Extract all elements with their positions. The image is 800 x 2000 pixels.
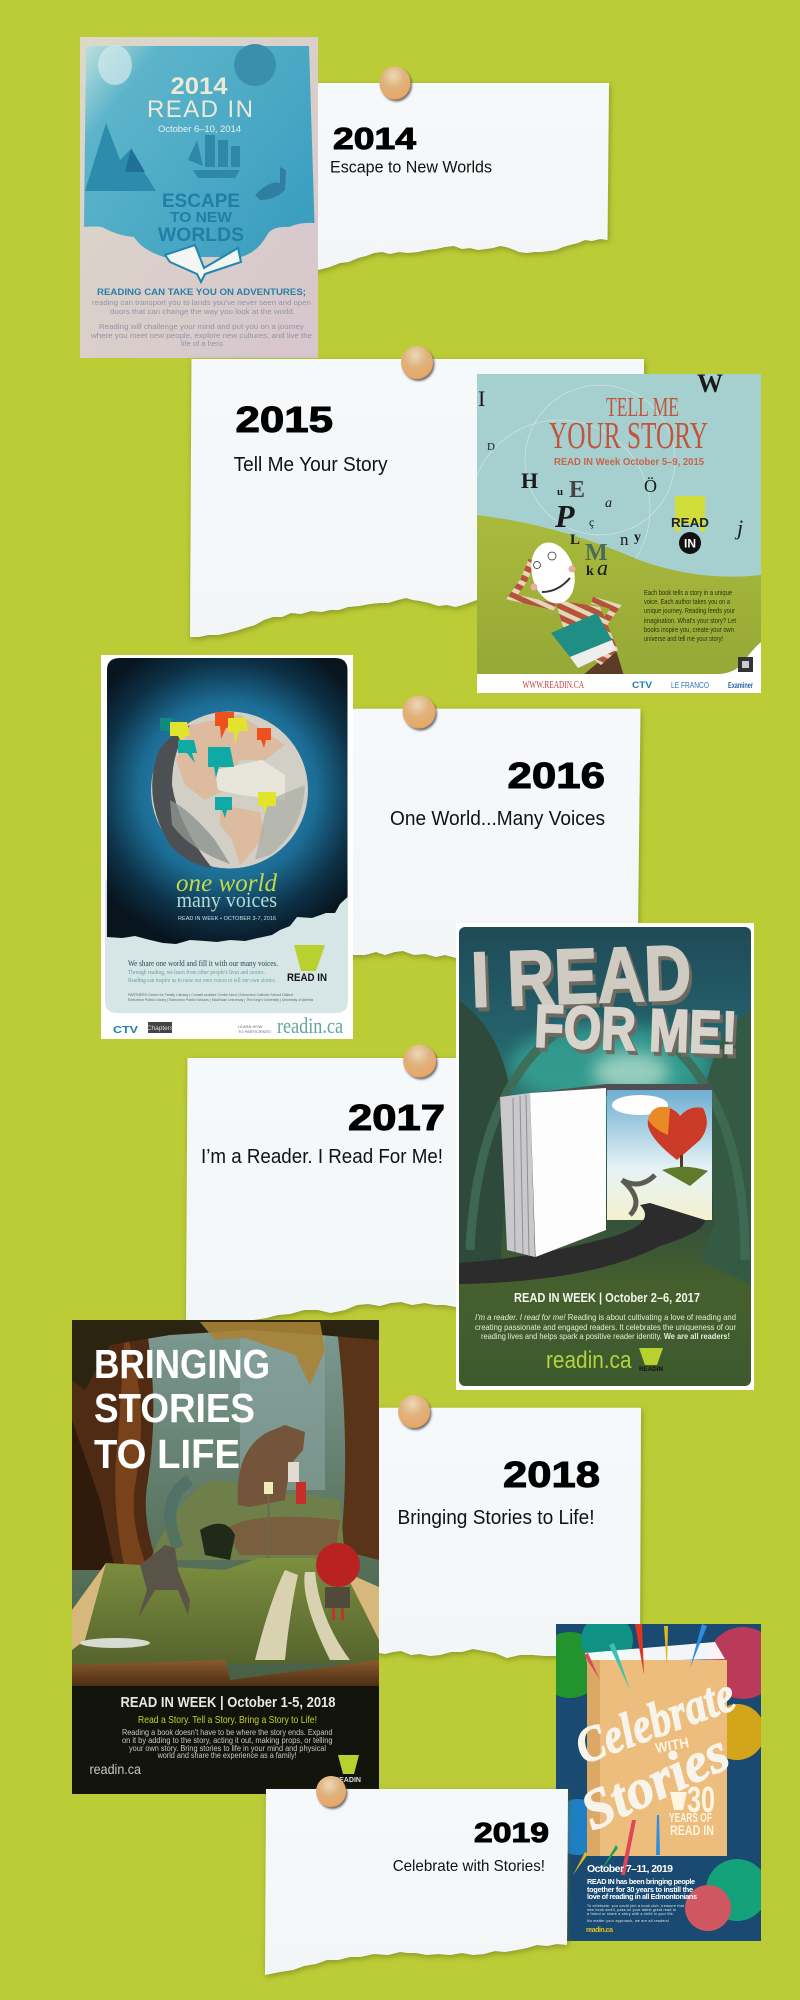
- year 2018: 2018: [503, 1454, 600, 1495]
- icon: pin 2016: [402, 696, 436, 728]
- poster: 2016 One World Many Voices: TO PARTICIPATE!: [238, 1029, 271, 1034]
- theme 2016: One World...Many Voices: [390, 808, 605, 830]
- poster: 2018 Bringing Stories to Life: [72, 1320, 379, 1794]
- poster: 2018 Bringing Stories to Life: Reading a book doesn't have to be where the story ends. Expand: [122, 1728, 332, 1737]
- poster: 2015 Tell Me Your Story: TELL ME: [606, 392, 679, 422]
- poster: 2018 Bringing Stories to Life: STORIES: [94, 1385, 255, 1431]
- poster: 2019 Celebrate with Stories: love of reading in all Edmontonians: [587, 1892, 697, 1901]
- poster: 2015 Tell Me Your Story: READ IN Week October 5–9, 2015: [554, 456, 704, 468]
- poster: 2017 I Read For Me: I'm a reader. I read for me! Reading is about cultivating a love of reading and: [475, 1312, 736, 1322]
- poster: 2017 I Read For Me: READ IN WEEK | October 2–6, 2017: [514, 1290, 700, 1305]
- poster: 2015 Tell Me Your Story: L: [570, 532, 580, 548]
- poster: 2015 Tell Me Your Story: a: [597, 555, 608, 580]
- poster: 2019 Celebrate with Stories: Celebrate: [568, 1665, 742, 1775]
- poster: 2017 I Read For Me: [456, 923, 754, 1390]
- poster: 2015 Tell Me Your Story: D: [487, 441, 495, 453]
- poster: 2019 Celebrate with Stories: WITH: [654, 1734, 690, 1756]
- poster: 2016 One World Many Voices: READ IN WEEK • OCTOBER 3-7, 2016: [178, 916, 276, 922]
- panel: 2016 torn paper note: [340, 709, 640, 958]
- poster: 2014 Escape to New Worlds: READ IN: [147, 96, 253, 123]
- poster: 2016 One World Many Voices: LEARN HOW: [238, 1024, 262, 1029]
- poster: 2015 Tell Me Your Story: n: [620, 530, 629, 549]
- theme 2014: Escape to New Worlds: [330, 158, 492, 177]
- poster: 2015 Tell Me Your Story: H: [521, 468, 538, 493]
- poster: 2015 Tell Me Your Story: Ö: [644, 476, 657, 496]
- poster: 2014 Escape to New Worlds: READING CAN TAKE YOU ON ADVENTURES;: [97, 287, 306, 298]
- poster: 2015 Tell Me Your Story: k: [586, 564, 594, 579]
- poster: 2015 Tell Me Your Story: voice. Each author takes you on a: [644, 599, 730, 606]
- poster: 2014 Escape to New Worlds: TO NEW: [170, 209, 233, 226]
- poster: 2018 Bringing Stories to Life: readin.ca: [90, 1761, 141, 1777]
- poster: 2015 Tell Me Your Story: books inspire you, create your own: [644, 627, 734, 634]
- poster: 2015 Tell Me Your Story: a: [605, 496, 612, 511]
- poster: 2016 One World Many Voices: many voices: [176, 887, 277, 912]
- poster: 2019 Celebrate with Stories: READ IN: [670, 1822, 714, 1838]
- poster: 2014 Escape to New Worlds: Reading will challenge your mind and put you on a journey: [99, 322, 304, 331]
- icon: pin 2014: [380, 66, 410, 100]
- poster: 2016 One World Many Voices: Edmonton Public Library | Edmonton Public Schools | MacEwan University | The King's University | University of Alberta: [128, 998, 313, 1002]
- poster: 2019 Celebrate with Stories: new book smell, pass on your latest great read to: [587, 1908, 676, 1912]
- poster: 2015 Tell Me Your Story: CTV: [632, 680, 652, 690]
- poster: 2018 Bringing Stories to Life: BRINGING: [94, 1341, 270, 1387]
- poster: 2015 Tell Me Your Story: universe and tell me your story!: [644, 636, 723, 643]
- poster: 2019 Celebrate with Stories: YEARS OF: [669, 1810, 712, 1825]
- poster: 2015 Tell Me Your Story: [470, 369, 761, 693]
- poster: 2016 One World Many Voices: Chapters: [147, 1025, 174, 1032]
- panel: 2015 torn paper note: [190, 359, 644, 637]
- poster: 2014 Escape to New Worlds: October 6–10, 2014: [158, 124, 241, 135]
- poster: 2016 One World Many Voices: READ IN: [287, 972, 327, 984]
- theme 2017: I’m a Reader. I Read For Me!: [201, 1146, 443, 1168]
- poster: 2017 I Read For Me: READIN: [639, 1366, 663, 1373]
- poster: 2019 Celebrate with Stories: [556, 1624, 761, 1941]
- poster: 2019 Celebrate with Stories: To celebrate, you could join a book club, treasure that: [587, 1904, 684, 1908]
- poster: 2015 Tell Me Your Story: READ: [671, 515, 709, 530]
- poster: 2015 Tell Me Your Story: Examiner: [728, 681, 753, 690]
- poster: 2016 One World Many Voices: one world: [176, 870, 278, 897]
- year 2015: 2015: [236, 399, 333, 440]
- poster: 2015 Tell Me Your Story: IN: [684, 536, 696, 550]
- poster: 2015 Tell Me Your Story: y: [634, 530, 641, 545]
- poster: 2019 Celebrate with Stories: readin.ca: [586, 1927, 613, 1934]
- poster: 2019 Celebrate with Stories: 30: [687, 1779, 715, 1820]
- poster: 2016 One World Many Voices: Through reading, we learn from other people's lives and stories.: [128, 969, 265, 976]
- poster: 2014 Escape to New Worlds: 2014: [170, 73, 228, 100]
- poster: 2019 Celebrate with Stories: Stories: [572, 1721, 738, 1843]
- poster: 2015 Tell Me Your Story: W: [697, 369, 723, 398]
- poster: 2015 Tell Me Your Story: ç: [589, 515, 594, 529]
- year 2019: 2019: [474, 1817, 549, 1848]
- panel: 2017 torn paper note: [186, 1058, 470, 1322]
- poster: 2014 Escape to New Worlds: life of a hero.: [181, 339, 225, 348]
- poster: 2017 I Read For Me: I READ: [470, 928, 693, 1024]
- poster: 2019 Celebrate with Stories: October 7–11, 2019: [587, 1863, 673, 1875]
- poster: 2015 Tell Me Your Story: unique journey. Reading feeds your: [644, 608, 736, 615]
- poster: 2018 Bringing Stories to Life: on it by adding to the story, acting it out, making props, or telling: [122, 1736, 332, 1745]
- poster: 2017 I Read For Me: readin.ca: [546, 1347, 632, 1374]
- poster: 2014 Escape to New Worlds: ESCAPE: [162, 191, 240, 212]
- panel: 2019 torn paper note: [265, 1789, 568, 1975]
- poster: 2015 Tell Me Your Story: LE FRANCO: [671, 681, 709, 690]
- poster: 2016 One World Many Voices: CTV: [113, 1025, 138, 1036]
- icon: pin 2019: [316, 1776, 346, 1807]
- icon: pin 2015: [401, 346, 433, 379]
- poster: 2019 Celebrate with Stories: a friend or share a story with a child in your life.: [587, 1912, 674, 1916]
- poster: 2016 One World Many Voices: We share one world and fill it with our many voices.: [128, 958, 278, 968]
- poster: 2015 Tell Me Your Story: u: [557, 486, 563, 498]
- poster: 2015 Tell Me Your Story: j: [734, 515, 743, 540]
- poster: 2018 Bringing Stories to Life: your own story. Bring stories to life in your mind and physical: [129, 1744, 326, 1753]
- poster: 2018 Bringing Stories to Life: TO LIFE: [94, 1431, 240, 1477]
- poster: 2019 Celebrate with Stories: READ IN has been bringing people: [587, 1877, 695, 1886]
- poster: 2015 Tell Me Your Story: I: [478, 386, 485, 411]
- poster: 2015 Tell Me Your Story: Each book tells a story in a unique: [644, 590, 732, 597]
- panel: 2018 torn paper note: [370, 1408, 641, 1658]
- poster: 2017 I Read For Me: reading lives and helps spark a positive reader identity. We are all readers!: [481, 1331, 730, 1341]
- poster: 2015 Tell Me Your Story: WWW.READIN.CA: [522, 680, 585, 691]
- poster: 2018 Bringing Stories to Life: world and share the experience as a family!: [157, 1751, 297, 1760]
- poster: 2015 Tell Me Your Story: P: [554, 498, 575, 534]
- theme 2015: Tell Me Your Story: [234, 454, 388, 476]
- poster: 2015 Tell Me Your Story: imagination. What's your story? Let: [644, 618, 736, 625]
- theme 2018: Bringing Stories to Life!: [398, 1507, 594, 1529]
- year 2017: 2017: [348, 1097, 445, 1138]
- poster: 2016 One World Many Voices: [101, 655, 353, 1039]
- theme 2019: Celebrate with Stories!: [393, 1858, 545, 1875]
- poster: 2014 Escape to New Worlds: WORLDS: [158, 225, 244, 246]
- poster: 2016 One World Many Voices: readin.ca: [277, 1013, 343, 1038]
- poster: 2016 One World Many Voices: PARTNERS Centre for Family Literacy | Conseil scolaire Centre-Nord | Edmonton Catholic School District: [128, 993, 293, 997]
- poster: 2016 One World Many Voices: Reading can inspire us to raise our own voices to tell our own stories.: [128, 977, 276, 984]
- icon: pin 2017: [403, 1044, 436, 1078]
- poster: 2018 Bringing Stories to Life: Read a Story. Tell a Story. Bring a Story to Life!: [138, 1714, 317, 1726]
- poster: 2014 Escape to New Worlds: doors that can change the way you look at the world.: [110, 307, 295, 316]
- icon: pin 2018: [398, 1395, 430, 1428]
- year 2016: 2016: [508, 755, 605, 796]
- panel: 2014 torn paper note: [300, 83, 609, 272]
- year 2014: 2014: [333, 121, 417, 156]
- poster: 2015 Tell Me Your Story: YOUR STORY: [549, 415, 708, 457]
- poster: 2015 Tell Me Your Story: M: [585, 540, 608, 566]
- poster: 2014 Escape to New Worlds: reading can transport you to lands you've never seen and open: [92, 298, 311, 307]
- poster: 2014 Escape to New Worlds: [80, 37, 318, 358]
- poster: 2015 Tell Me Your Story: E: [569, 477, 585, 503]
- poster: 2019 Celebrate with Stories: together for 30 years to instill the: [587, 1885, 693, 1894]
- poster: 2014 Escape to New Worlds: where you meet new people, explore new cultures, and live the: [90, 331, 312, 340]
- poster: 2018 Bringing Stories to Life: READIN: [334, 1775, 361, 1784]
- poster: 2018 Bringing Stories to Life: READ IN WEEK | October 1-5, 2018: [120, 1694, 336, 1711]
- poster: 2019 Celebrate with Stories: No matter your approach, we are all readers!: [587, 1919, 669, 1923]
- poster: 2017 I Read For Me: creating passionate and engaged readers. It celebrates the uniqueness of our: [475, 1322, 736, 1332]
- poster: 2017 I Read For Me: FOR ME!: [533, 992, 738, 1067]
